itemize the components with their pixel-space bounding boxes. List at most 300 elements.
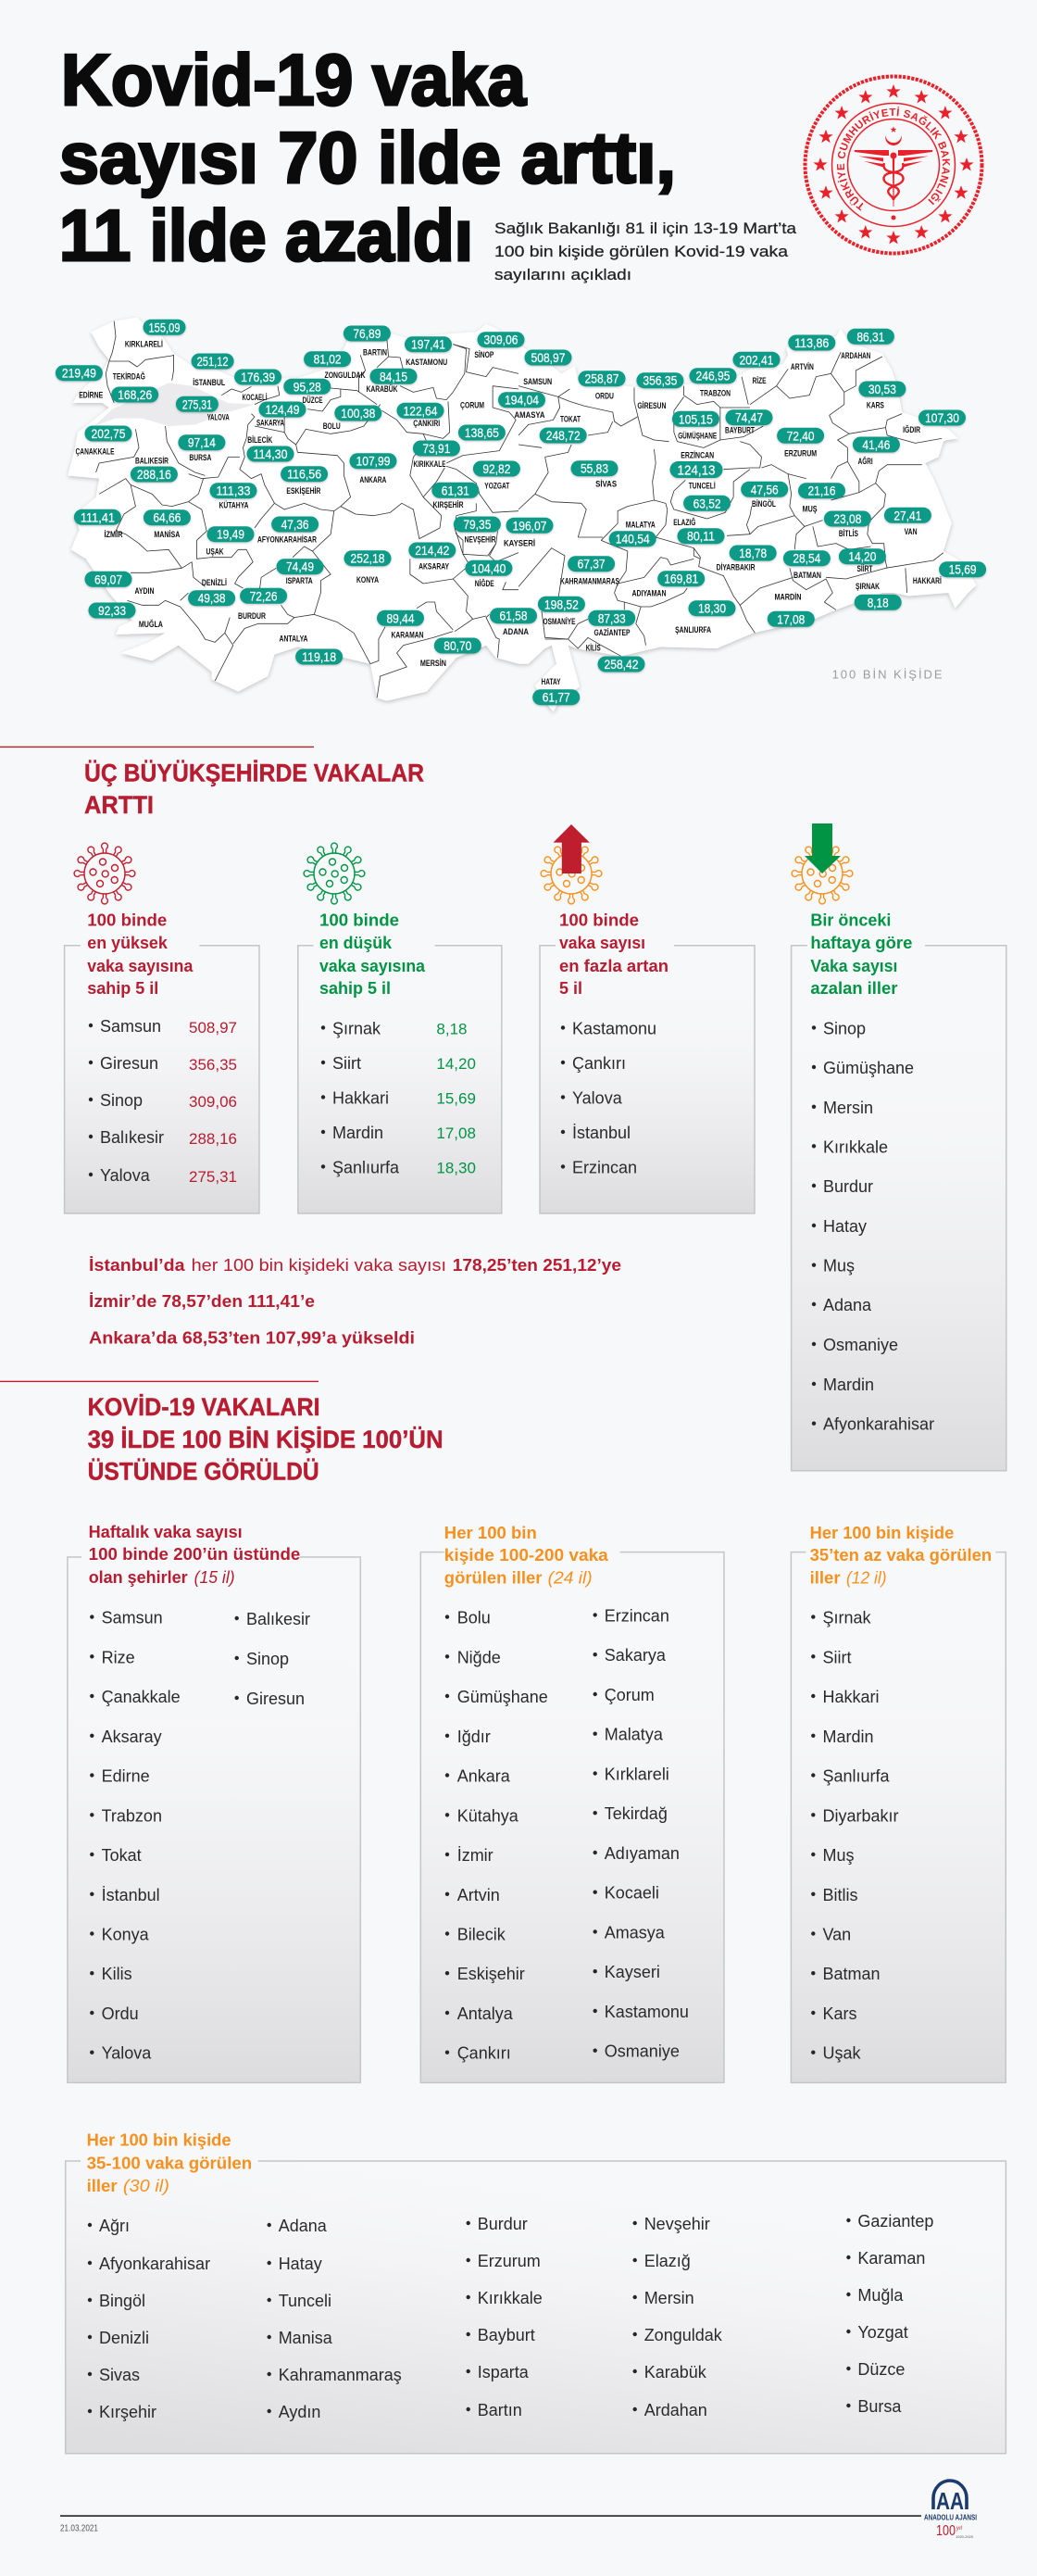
- province list: Sinop: [246, 1650, 289, 1668]
- province list column 1: Sivas: [99, 2366, 140, 2384]
- map: province names: AYDIN: [135, 586, 155, 597]
- map: province names: BİLECİK: [247, 435, 272, 446]
- panel: under 35 per 100 thousand (12 provinces): [791, 1524, 1006, 2082]
- map: province names: KONYA: [356, 575, 379, 585]
- divider line section 2: [0, 1381, 319, 1382]
- province list: Erzincan: [605, 1606, 669, 1625]
- map: province names: BİNGÖL: [752, 499, 776, 509]
- map of Turkey with weekly cases per 100 thousand by province: [56, 318, 986, 711]
- province list: Sakarya: [605, 1646, 667, 1665]
- province list: Erzincan: [572, 1158, 637, 1176]
- map: province names: HATAY: [541, 677, 561, 687]
- map: Sea of Marmara: [94, 383, 255, 426]
- panel heading: en fazla artan: [559, 957, 668, 975]
- province list: Edirne: [102, 1767, 150, 1786]
- map: value pill numbers: 72,40: [787, 428, 815, 443]
- map: value pill numbers: 124,13: [678, 463, 715, 478]
- province list with values: 275,31: [189, 1168, 237, 1186]
- map: province names: ARTVİN: [791, 362, 814, 372]
- province list: Kastamonu: [572, 1019, 656, 1037]
- heading: section 1: [84, 760, 424, 819]
- province list: Uşak: [822, 2044, 862, 2063]
- map: value pill numbers: 508,97: [531, 350, 566, 365]
- province list: Siirt: [822, 1648, 852, 1666]
- map: value pill numbers: 95,28: [294, 379, 321, 394]
- map: province names: NİĞDE: [475, 578, 494, 589]
- province list column 1: Kırşehir: [99, 2403, 156, 2421]
- panel heading: sahip 5 il: [87, 979, 158, 998]
- province list: Malatya: [605, 1726, 664, 1744]
- province list with values: Hakkari: [332, 1088, 389, 1107]
- map: value pill numbers: 61,58: [500, 609, 528, 623]
- province list: Gümüşhane: [457, 1688, 548, 1706]
- panel: provinces with decreasing cases: [792, 911, 1006, 1471]
- map: province names: HAKKARİ: [913, 576, 942, 586]
- province list: [811, 1609, 899, 2063]
- panel heading: olan şehirler: [89, 1568, 188, 1587]
- map: value pill numbers: 97,14: [188, 435, 216, 450]
- province list: Mardin: [822, 1728, 874, 1746]
- panel heading: azalan iller: [810, 979, 897, 998]
- panel: 35-100 per 100 thousand (30 provinces): [66, 2131, 1006, 2454]
- panel: highest 5 provinces: [65, 911, 259, 1213]
- map: value pill numbers: 47,36: [281, 517, 309, 532]
- province list: Balıkesir: [246, 1610, 310, 1628]
- province list: Mersin: [823, 1099, 873, 1117]
- province list column 2: Kahramanmaraş: [279, 2366, 402, 2384]
- map: value pill numbers: 30,53: [868, 382, 896, 396]
- province list: Muş: [823, 1257, 855, 1275]
- icon: red virus: [74, 843, 135, 904]
- text block: three metropolitan cities: İzmir’de 78,57’den 111,41’e: [89, 1292, 315, 1311]
- map: province names: ERZİNCAN: [681, 450, 714, 461]
- map: province names: BAYBURT: [725, 426, 755, 435]
- province list: Burdur: [823, 1177, 873, 1196]
- map: value pill numbers: 80,11: [687, 529, 715, 544]
- province list column 3: Isparta: [478, 2363, 530, 2381]
- panel: largest increase 5 provinces: [540, 911, 755, 1213]
- province list: Ordu: [102, 2004, 139, 2023]
- text block: three metropolitan cities: İstanbul’da: [89, 1256, 186, 1275]
- province list: Bitlis: [822, 1886, 858, 1904]
- map: province names: DÜZCE: [302, 396, 322, 406]
- map: value pill numbers: 100,38: [341, 406, 375, 421]
- panel heading: 100 binde 200’ün üstünde: [89, 1545, 300, 1564]
- title: Kovid-19 vaka: [61, 39, 527, 120]
- province list: [812, 1019, 934, 1434]
- panel heading: [559, 911, 668, 998]
- subtitle: sayılarını açıkladı: [494, 266, 631, 283]
- province list: Bolu: [457, 1609, 491, 1627]
- province list with values: Yalova: [100, 1166, 151, 1185]
- map: province names: KIRIKKALE: [413, 459, 446, 470]
- map: province names: AKSARAY: [419, 561, 450, 572]
- heading: section 1: ÜÇ BÜYÜKŞEHİRDE VAKALAR: [84, 760, 424, 787]
- map: province names: TUNCELİ: [689, 482, 716, 491]
- map: value pill numbers: 76,89: [353, 326, 381, 341]
- panel heading: haftaya göre: [810, 934, 912, 952]
- map: province names: TOKAT: [560, 415, 581, 424]
- province list: Tokat: [102, 1846, 142, 1865]
- map: value pill numbers: 92,33: [98, 603, 126, 618]
- map: value pill numbers: 17,08: [777, 611, 805, 626]
- icon: green virus: [304, 843, 365, 904]
- province list: Konya: [102, 1925, 150, 1943]
- map: province names: EDİRNE: [79, 391, 103, 400]
- map: value pill numbers: 114,30: [254, 446, 288, 461]
- map: province names: İSTANBUL: [193, 378, 225, 388]
- province list: Hatay: [823, 1217, 867, 1236]
- map: value pill numbers: 252,18: [350, 551, 385, 566]
- province list: Kayseri: [605, 1963, 660, 1981]
- map: value pill numbers: 69,07: [94, 572, 122, 586]
- map: value pill numbers: 197,41: [411, 337, 445, 352]
- province list column 4: Mersin: [644, 2289, 694, 2307]
- province list: Diyarbakır: [822, 1806, 899, 1825]
- province list with values: [321, 1019, 476, 1176]
- panel heading: vaka sayısı: [559, 934, 645, 952]
- map: province names: MANİSA: [154, 530, 180, 540]
- heading: section 1: ARTTI: [84, 791, 154, 819]
- map: value pill numbers: 275,31: [182, 396, 212, 411]
- map: value pill numbers: 107,30: [925, 410, 959, 425]
- province list column 5: Bursa: [857, 2397, 902, 2416]
- panel heading: görülen iller: [444, 1569, 542, 1588]
- province list with values: Mardin: [332, 1124, 383, 1142]
- heading: section 2: [88, 1393, 444, 1486]
- panel heading: Vaka sayısı: [810, 957, 897, 975]
- map: province names: MUĞLA: [139, 619, 163, 630]
- province list column 2: Tunceli: [279, 2292, 331, 2310]
- map: value pill numbers: [62, 320, 977, 705]
- province list: Osmaniye: [823, 1336, 898, 1354]
- map: value pill numbers: 111,41: [81, 509, 115, 524]
- province list: Kırklareli: [605, 1766, 669, 1784]
- province list: [561, 1019, 656, 1176]
- map: value pill numbers: 18,30: [698, 601, 726, 616]
- footer date: 21.03.2021: [60, 2524, 98, 2534]
- icon: health ministry seal: [804, 74, 983, 256]
- logo: Anadolu Ajansı 100 yıl: 100: [936, 2523, 956, 2539]
- panel heading: vaka sayısına: [87, 957, 194, 975]
- province list: Afyonkarahisar: [823, 1415, 934, 1434]
- province list with values: 356,35: [189, 1056, 237, 1074]
- province list with values: [89, 1017, 237, 1186]
- province list column 5: Gaziantep: [857, 2212, 933, 2230]
- province list: Samsun: [102, 1609, 163, 1627]
- province list: Yalova: [102, 2044, 152, 2063]
- province list with values: 17,08: [436, 1125, 476, 1142]
- map: value pill numbers: 202,41: [739, 352, 774, 367]
- map: province names: KAYSERİ: [504, 539, 535, 548]
- panel heading: 100 binde: [319, 911, 399, 929]
- text block: three metropolitan cities: Ankara’da 68,53’ten 107,99’a yükseldi: [89, 1329, 415, 1348]
- province list with values: 14,20: [436, 1055, 476, 1073]
- map: value pill numbers: 63,52: [693, 496, 721, 510]
- province list: Giresun: [246, 1690, 305, 1708]
- map: province names: ERZURUM: [784, 448, 817, 459]
- province list column 1: [88, 2217, 210, 2421]
- map: value pill numbers: 72,26: [250, 588, 278, 603]
- province list: Mardin: [823, 1376, 874, 1394]
- map: value pill numbers: 64,66: [153, 510, 181, 525]
- map: province names: ÇANKIRI: [413, 419, 440, 429]
- province list with values: Şırnak: [332, 1019, 381, 1037]
- province list: Ankara: [457, 1767, 511, 1786]
- map: value pill numbers: 74,49: [286, 559, 314, 574]
- map: value pill numbers: 18,78: [739, 546, 767, 560]
- panel heading: (12 il): [846, 1569, 887, 1588]
- province list with values: 15,69: [436, 1089, 476, 1107]
- map: province names: ŞANLIURFA: [675, 625, 711, 635]
- map: province names: GAZİANTEP: [594, 628, 631, 638]
- map: province names: KİLİS: [586, 643, 601, 654]
- province list with values: 309,06: [189, 1093, 237, 1111]
- map: province names: ELAZIĞ: [673, 517, 695, 528]
- province list: Artvin: [457, 1886, 500, 1904]
- map: province names: KOCAELİ: [243, 393, 267, 403]
- province list: Hakkari: [822, 1688, 880, 1706]
- map: value pill numbers: 155,09: [148, 320, 181, 334]
- province list: Batman: [822, 1965, 881, 1983]
- province list column 2: Aydın: [279, 2403, 320, 2421]
- province list column 1: Bingöl: [99, 2292, 145, 2310]
- map: province names: ARDAHAN: [841, 351, 870, 361]
- province list: Gümüşhane: [823, 1059, 914, 1077]
- map: province names: İZMİR: [104, 530, 123, 540]
- map: province names: SİNOP: [474, 350, 494, 360]
- province list column 4: Nevşehir: [644, 2215, 710, 2233]
- province list column 1: Afyonkarahisar: [99, 2255, 210, 2273]
- panel heading: Her 100 bin kişide: [810, 1524, 954, 1542]
- map: province names: IĞDIR: [903, 424, 920, 435]
- panel heading: 35-100 vaka görülen: [87, 2155, 252, 2173]
- province list: Şırnak: [822, 1609, 872, 1627]
- map: province names: SİİRT: [857, 564, 873, 574]
- logo: Anadolu Ajansı 100 yıl: yıl: [956, 2526, 963, 2532]
- map: province names: KARS: [867, 400, 884, 411]
- map: value pill numbers: 41,46: [862, 437, 891, 452]
- province list: İstanbul: [572, 1124, 631, 1142]
- province list with values: Siirt: [332, 1054, 361, 1073]
- panel heading: 100 binde: [87, 911, 167, 929]
- panel heading: (30 il): [123, 2177, 169, 2195]
- panel heading: 100 binde: [559, 911, 639, 929]
- map: province names: BOLU: [323, 421, 341, 432]
- map: province names: SİVAS: [595, 480, 617, 489]
- panel heading: [89, 1523, 300, 1587]
- map: province names: ŞIRNAK: [856, 582, 880, 592]
- map: province names: MUŞ: [803, 504, 818, 515]
- province list: İzmir: [457, 1846, 494, 1865]
- map: province names: MARDİN: [774, 593, 802, 602]
- map: province names: TRABZON: [700, 389, 731, 398]
- map: province names: DENİZLİ: [202, 578, 227, 588]
- map: value pill numbers: 258,87: [585, 371, 619, 386]
- map: value pill numbers: 73,91: [422, 441, 451, 456]
- logo: Anadolu Ajansı 100 yıl: ANADOLU AJANSI: [924, 2512, 977, 2521]
- map: value pill numbers: 80,70: [444, 638, 471, 653]
- map: value pill numbers: 74,47: [735, 410, 763, 425]
- panel: above 200 per 100 thousand (15 provinces): [68, 1523, 360, 2082]
- province list: [445, 1606, 689, 2063]
- logo: Anadolu Ajansı 100 yıl: 1920-2020: [956, 2534, 974, 2539]
- map: province names: RİZE: [752, 376, 767, 386]
- map: province names: [76, 339, 942, 687]
- map: province names: OSMANİYE: [543, 617, 576, 627]
- panel heading: Bir önceki: [810, 911, 891, 929]
- province list column 4: Zonguldak: [644, 2326, 723, 2344]
- map: province names: MERSİN: [420, 659, 446, 669]
- province list: Niğde: [457, 1648, 501, 1666]
- map: province names: GÜMÜŞHANE: [678, 432, 717, 441]
- map: province names: ADANA: [503, 627, 529, 637]
- province list column 3: Burdur: [478, 2215, 528, 2233]
- map: value pill numbers: 87,33: [598, 610, 626, 625]
- province list column 4: Ardahan: [644, 2401, 707, 2419]
- map: province names: BİTLİS: [839, 529, 858, 539]
- map: value pill numbers: 8,18: [868, 595, 889, 609]
- title: sayısı 70 ilde arttı,: [59, 117, 676, 198]
- map: value pill numbers: 124,49: [265, 402, 300, 417]
- map: value pill numbers: 21,16: [807, 484, 836, 498]
- map: province names: GİRESUN: [637, 401, 666, 411]
- province list column 2: Adana: [279, 2217, 328, 2235]
- map: province names: BURDUR: [238, 611, 266, 622]
- map: value pill numbers: 176,39: [241, 370, 275, 384]
- map: value pill numbers: 104,40: [471, 560, 506, 575]
- map: province names: ADIYAMAN: [631, 589, 667, 598]
- province list column 1: Ağrı: [99, 2217, 130, 2235]
- panel heading: [87, 2131, 252, 2195]
- map: province names: AFYONKARAHİSAR: [257, 535, 317, 545]
- heading: section 2: ÜSTÜNDE GÖRÜLDÜ: [88, 1458, 319, 1486]
- text block: three metropolitan cities: her 100 bin kişideki vaka sayısı: [192, 1256, 446, 1275]
- province list: Çankırı: [572, 1054, 626, 1073]
- map: value pill numbers: 119,18: [302, 649, 336, 664]
- province list with values: 508,97: [189, 1019, 237, 1037]
- map: province names: YOZGAT: [484, 482, 509, 491]
- map: province names: AĞRI: [858, 456, 873, 467]
- panel heading: [444, 1524, 609, 1588]
- map: value pill numbers: 288,16: [137, 467, 171, 482]
- map: province names: KAHRAMANMARAŞ: [560, 576, 619, 587]
- map: province names: BALIKESİR: [135, 456, 169, 467]
- province list column 3: Erzurum: [478, 2252, 541, 2270]
- province list column 1: Denizli: [99, 2329, 149, 2347]
- subtitle: [494, 220, 797, 283]
- map: western province borders: [96, 321, 518, 697]
- map: province names: SAKARYA: [256, 419, 284, 428]
- heading: section 2: KOVİD-19 VAKALARI: [88, 1393, 320, 1421]
- map: value pill numbers: 61,77: [543, 690, 570, 705]
- map: province names: KARABÜK: [367, 384, 398, 395]
- panel heading: kişide 100-200 vaka: [444, 1546, 609, 1564]
- subtitle: 100 bin kişide görülen Kovid-19 vaka: [494, 243, 789, 260]
- province list: Tekirdağ: [605, 1804, 668, 1823]
- icon: orange virus with green down arrow: [792, 823, 853, 904]
- map: value pill numbers: 111,33: [217, 484, 251, 498]
- map: province names: VAN: [905, 527, 918, 537]
- map: province names: DİYARBAKIR: [717, 563, 756, 572]
- map: province names: KÜTAHYA: [219, 500, 249, 511]
- panel heading: [87, 911, 194, 998]
- map: province names: KARAMAN: [391, 630, 424, 641]
- map: province names: NEVŞEHİR: [465, 535, 496, 545]
- panel heading: Her 100 bin: [444, 1524, 537, 1542]
- map: value pill numbers: 28,54: [793, 551, 821, 566]
- map: value pill numbers: 169,81: [664, 572, 698, 586]
- province list: Sinop: [823, 1019, 866, 1037]
- panel heading: en yüksek: [87, 934, 169, 952]
- province list: Muş: [822, 1846, 855, 1865]
- map: province names: BURSA: [189, 453, 211, 463]
- panel heading: en düşük: [319, 934, 393, 952]
- province list: [90, 1609, 310, 2063]
- panel heading: [810, 911, 912, 998]
- map: province names: ANKARA: [359, 475, 386, 485]
- map: province names: KIRKLARELİ: [125, 339, 163, 350]
- map: value pill numbers: 251,12: [197, 354, 229, 369]
- map: value pill numbers: 194,04: [505, 393, 539, 408]
- province list: Amasya: [605, 1923, 666, 1941]
- panel heading: sahip 5 il: [319, 979, 391, 998]
- map: value pill numbers: 214,42: [415, 543, 449, 558]
- province list column 5: Muğla: [857, 2286, 904, 2305]
- province list: Kastamonu: [605, 2003, 689, 2021]
- map: value pill numbers: 116,56: [287, 467, 321, 482]
- map: value pill numbers: 79,35: [463, 517, 492, 532]
- province list: Antalya: [457, 2004, 514, 2023]
- panel heading: iller: [810, 1569, 841, 1588]
- map: value pill numbers: 356,35: [643, 373, 678, 388]
- province list: Kocaeli: [605, 1884, 659, 1903]
- panel heading: [319, 911, 426, 998]
- province list: Kütahya: [457, 1806, 519, 1825]
- panel heading: iller: [87, 2177, 118, 2195]
- map: province names: ESKİŞEHİR: [286, 486, 320, 496]
- province list: Yalova: [572, 1088, 623, 1107]
- map: province names: YALOVA: [207, 413, 230, 422]
- text block: three metropolitan cities: [89, 1256, 621, 1348]
- map: province names: SAMSUN: [523, 377, 552, 387]
- map: value pill numbers: 196,07: [513, 518, 547, 533]
- map: province names: ISPARTA: [286, 576, 313, 586]
- province list with values: 288,16: [189, 1130, 237, 1148]
- map: value pill numbers: 84,15: [380, 369, 407, 383]
- province list with values: Şanlıurfa: [332, 1158, 400, 1176]
- map: province names: MALATYA: [626, 521, 656, 530]
- footer line: [60, 2515, 921, 2517]
- map: province names: KASTAMONU: [406, 358, 447, 368]
- panel heading: (24 il): [548, 1569, 593, 1588]
- province list: Aksaray: [102, 1728, 162, 1746]
- map: value pill numbers: 61,31: [442, 483, 469, 497]
- panel: 100-200 per 100 thousand (24 provinces): [420, 1524, 724, 2082]
- map: province names: AMASYA: [515, 410, 545, 421]
- map: value pill numbers: 81,02: [314, 352, 342, 367]
- panel heading: vaka sayısına: [319, 957, 426, 975]
- map: value pill numbers: 219,49: [62, 366, 96, 381]
- map: value pill numbers: 89,44: [387, 610, 415, 625]
- map: value pill numbers: 47,56: [751, 482, 779, 496]
- icon: health ministry seal: TÜRKİYE CUMHURİYETİ SAĞLIK BAKANLIĞI: [837, 107, 950, 211]
- map: province names: ÇORUM: [460, 400, 484, 411]
- province list column 3: Kırıkkale: [478, 2289, 543, 2307]
- map: province names: ÇANAKKALE: [76, 446, 115, 458]
- logo: Anadolu Ajansı 100 yıl: AA: [936, 2487, 964, 2515]
- map unit label: 100 BİN KİŞİDE: [832, 668, 943, 682]
